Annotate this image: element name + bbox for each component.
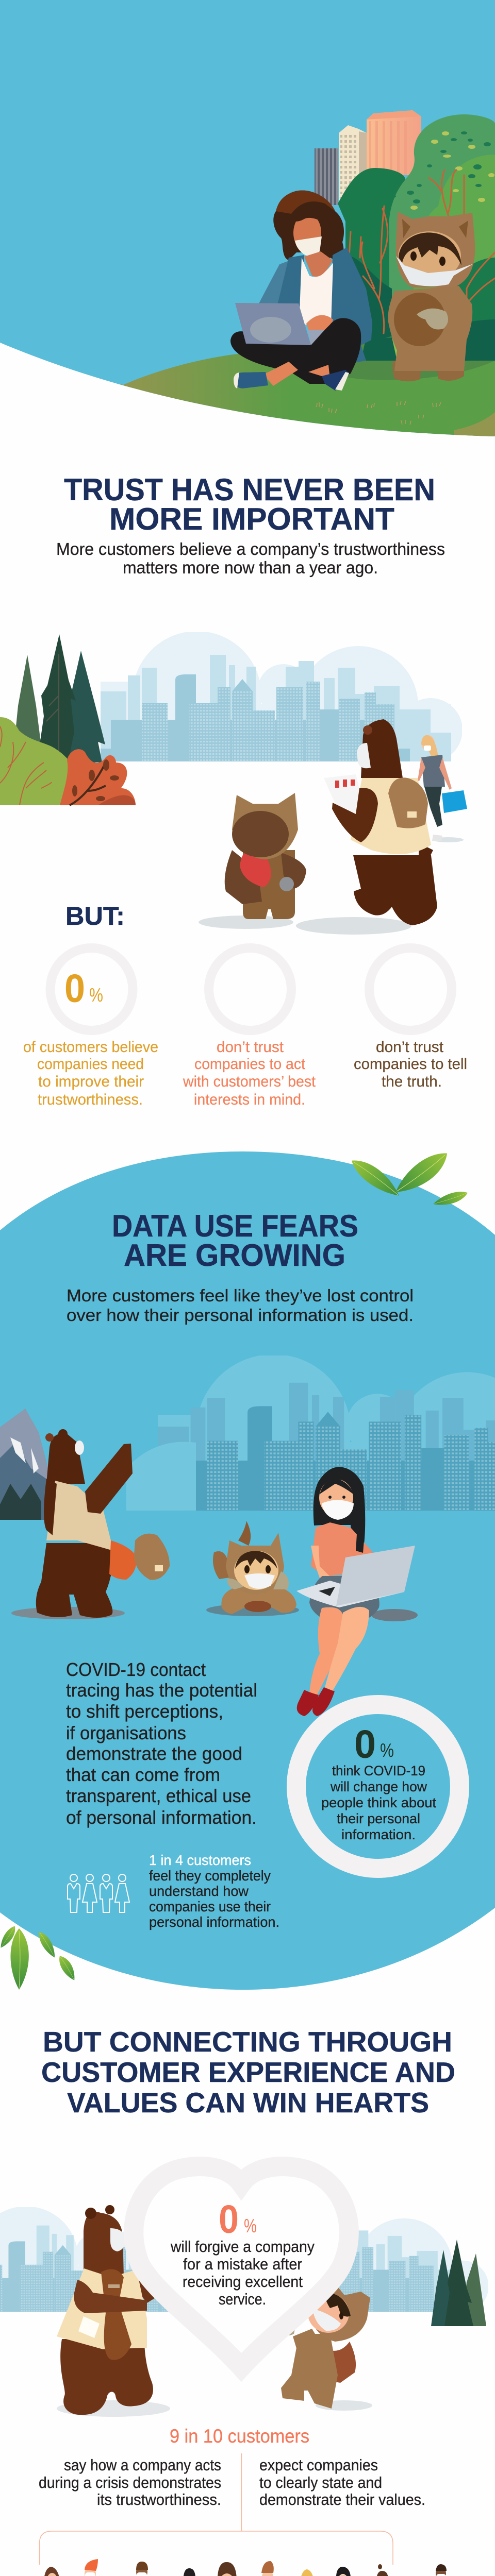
orange bush — [60, 749, 136, 805]
stat ring: covid thinking — [296, 1704, 460, 1868]
intro text: trust: matters more now than a year ago. — [123, 558, 378, 577]
stat text: 1 in 4 customers: feel they completely — [149, 1868, 271, 1884]
stat text: 1 in 4 customers: 1 in 4 customers — [149, 1852, 251, 1868]
crowd of customers — [36, 2559, 467, 2576]
large tree — [387, 114, 495, 335]
ring two label — [183, 1039, 316, 1108]
city towers — [315, 110, 421, 205]
ring label — [321, 1763, 436, 1842]
stat ring: covid thinking: % — [380, 1740, 394, 1761]
dropped backpacks — [109, 1534, 170, 1580]
right callout text: demonstrate their values. — [259, 2490, 425, 2509]
hero illustration panel — [0, 0, 495, 443]
body paragraph: contact tracing — [66, 1659, 257, 1828]
title: data use fears: ARE GROWING — [124, 1238, 345, 1273]
person 2 — [73, 2559, 119, 2576]
green hill — [116, 319, 495, 436]
ring label: people think about — [321, 1795, 436, 1810]
heart panel: % — [244, 2215, 257, 2236]
bare branches — [349, 170, 495, 333]
ring two label: with customers’ best — [183, 1073, 316, 1090]
intro text: data: over how their personal information is used. — [67, 1306, 414, 1325]
mascot lying down — [206, 1521, 299, 1616]
title: data use fears — [112, 1209, 358, 1273]
mascot with phone — [277, 2283, 372, 2411]
mascot seen from behind — [199, 793, 306, 929]
title: data use fears: DATA USE FEARS — [112, 1209, 358, 1243]
body paragraph: contact tracing: of personal information. — [66, 1807, 257, 1828]
stat ring one: 0 — [64, 967, 85, 1011]
sneakers and ankles — [234, 362, 349, 391]
ring two label: companies to act — [194, 1056, 306, 1073]
ring label: their personal — [337, 1811, 420, 1826]
ring two label: interests in mind. — [194, 1091, 305, 1108]
person 9 — [367, 2564, 399, 2576]
ring label: think COVID-19 — [332, 1763, 425, 1778]
undergrowth — [340, 256, 392, 361]
person 8 — [330, 2567, 363, 2576]
intro text: data: More customers feel like they’ve lost control — [67, 1286, 414, 1305]
ring one label: to improve their — [38, 1073, 144, 1090]
body paragraph: contact tracing: if organisations — [66, 1722, 186, 1743]
person 3 — [122, 2562, 158, 2576]
heart label: for a mistake after — [183, 2255, 302, 2273]
right callout text — [259, 2456, 425, 2509]
shopper with bag — [418, 735, 467, 842]
ring label: information. — [341, 1827, 416, 1842]
body paragraph: contact tracing: that can come from — [66, 1764, 220, 1785]
bear seen from behind — [296, 719, 437, 935]
stat ring: covid thinking: 0 — [354, 1722, 376, 1767]
intro text: trust: More customers believe a company’s trustworthiness — [56, 539, 445, 558]
right callout text: to clearly state and — [259, 2473, 382, 2492]
left callout text: during a crisis demonstrates — [39, 2473, 221, 2492]
ring two label: don’t trust — [217, 1039, 284, 1056]
heart panel: 0 — [219, 2197, 239, 2242]
intro text: trust — [56, 539, 445, 577]
body paragraph: contact tracing: to shift perceptions, — [66, 1701, 223, 1722]
person 4 — [179, 2568, 208, 2576]
stat text: 1 in 4 customers: personal information. — [149, 1914, 279, 1930]
body paragraph: contact tracing: COVID-19 contact — [66, 1659, 206, 1680]
leaves top right — [347, 1146, 469, 1209]
callout: 9 in 10 customers: 9 in 10 customers — [170, 2426, 309, 2447]
body paragraph: contact tracing: transparent, ethical use — [66, 1785, 251, 1806]
heart label: service. — [219, 2290, 266, 2308]
stat text: 1 in 4 customers: understand how — [149, 1883, 249, 1899]
right callout text: expect companies — [259, 2456, 378, 2474]
leaves bottom left — [0, 1924, 79, 1990]
title: trust — [64, 472, 435, 536]
stat ring one — [23, 948, 158, 1108]
hero sky — [0, 0, 495, 436]
title: trust: TRUST HAS NEVER BEEN — [64, 472, 435, 507]
body paragraph: contact tracing: tracing has the potential — [66, 1680, 257, 1701]
panel: customers expect action — [0, 2559, 495, 2576]
woman with laptop — [296, 1467, 418, 1716]
city skyline two — [126, 1354, 495, 1516]
person 7 — [292, 2569, 323, 2576]
left callout text: say how a company acts — [64, 2456, 221, 2474]
person 5 — [213, 2562, 240, 2576]
stat ring one: % — [89, 985, 103, 1006]
stat text: 1 in 4 customers — [149, 1852, 279, 1930]
heart panel — [134, 2166, 349, 2367]
left callout text: its trustworthiness. — [97, 2490, 221, 2509]
person 10 — [426, 2564, 467, 2576]
bracket connector — [39, 2453, 393, 2565]
title: connecting — [41, 2026, 455, 2119]
left trees — [12, 634, 105, 762]
mountain left — [0, 1409, 54, 1520]
ring label: will change how — [330, 1779, 427, 1794]
ring three label — [354, 1039, 467, 1090]
person 6 — [254, 2561, 286, 2576]
ring one label: trustworthiness. — [38, 1091, 143, 1108]
intro text: data — [67, 1286, 414, 1325]
city skyline three — [0, 2206, 489, 2315]
ring one label — [23, 1039, 158, 1108]
heart label: receiving excellent — [183, 2273, 303, 2291]
ring one label: companies need — [37, 1056, 144, 1073]
bear waving — [11, 1429, 170, 1619]
person 1 — [36, 2567, 67, 2576]
panel: data use fears — [0, 1146, 495, 1990]
right trees — [431, 2240, 486, 2326]
icon: four people — [68, 1874, 129, 1912]
ring three label: companies to tell — [354, 1056, 467, 1073]
stat ring three — [354, 948, 467, 1090]
heart label: will forgive a company — [170, 2238, 315, 2256]
dark tree — [338, 168, 405, 355]
mascot with mask — [388, 212, 475, 381]
ring three label: the truth. — [382, 1073, 442, 1090]
stat text: 1 in 4 customers: companies use their — [149, 1899, 271, 1914]
city skyline one — [101, 631, 463, 766]
ring one label: of customers believe — [23, 1039, 158, 1056]
left callout text — [39, 2456, 221, 2509]
bear with crossed arms — [57, 2205, 170, 2417]
green bush — [0, 717, 75, 805]
heart label — [170, 2238, 315, 2308]
title: connecting: BUT CONNECTING THROUGH — [43, 2026, 452, 2058]
body paragraph: contact tracing: demonstrate the good — [66, 1743, 242, 1764]
ring three label: don’t trust — [376, 1039, 444, 1056]
title: connecting: VALUES CAN WIN HEARTS — [67, 2087, 429, 2119]
title: trust: MORE IMPORTANT — [109, 502, 394, 536]
woman with laptop — [230, 190, 372, 391]
subheading: but: BUT: — [65, 902, 125, 930]
stat ring two — [183, 948, 316, 1108]
title: connecting: CUSTOMER EXPERIENCE AND — [41, 2056, 455, 2088]
grass tufts — [317, 401, 441, 425]
